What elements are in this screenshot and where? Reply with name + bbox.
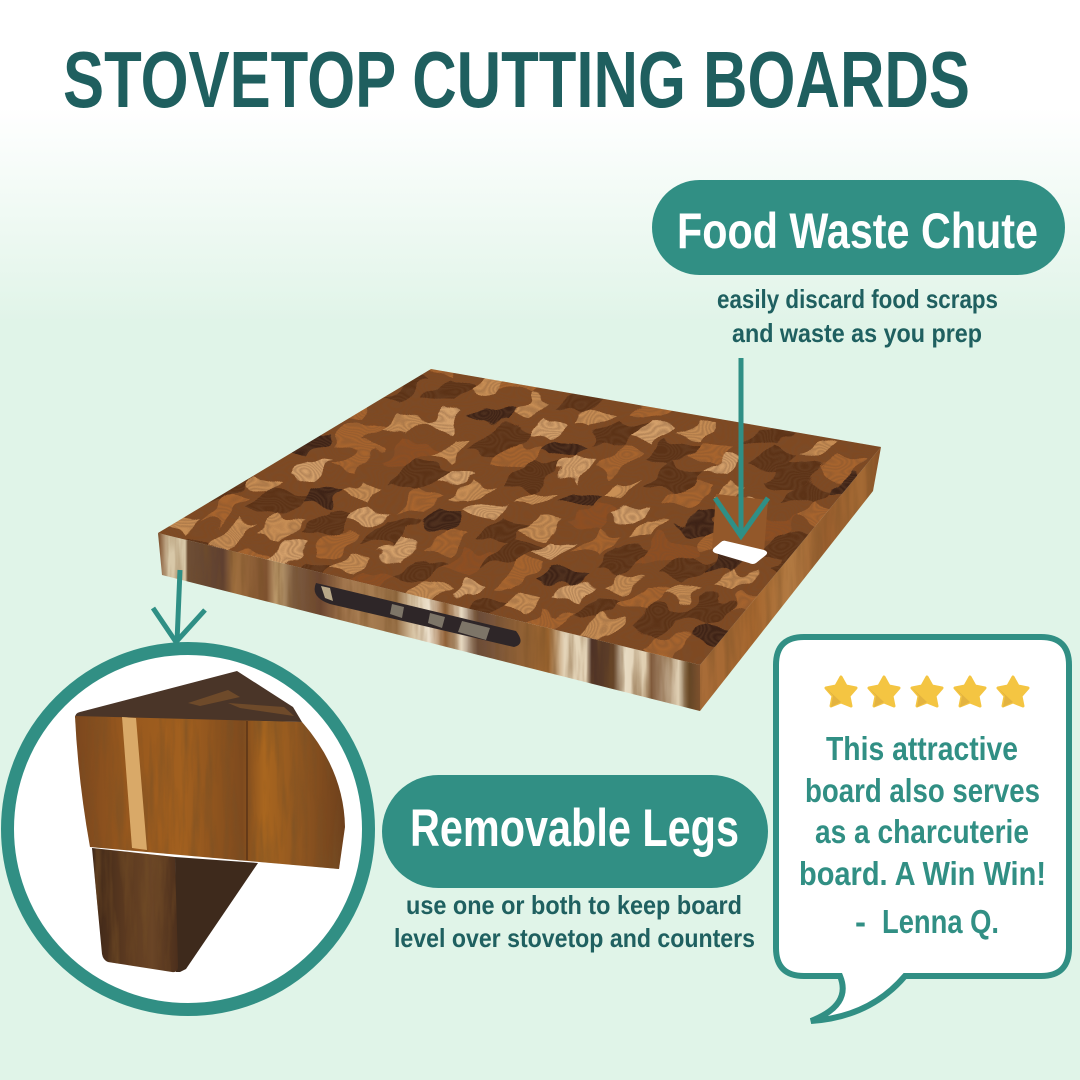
board top edge — [75, 671, 302, 722]
food waste chute description: and waste as you prep — [732, 318, 982, 348]
customer quote: This attractive — [826, 730, 1018, 767]
food waste chute description: easily discard food scraps — [717, 284, 998, 314]
cutting board photo — [130, 339, 973, 720]
arrow to removable leg — [153, 570, 205, 642]
removable legs description — [394, 890, 755, 953]
arrow to food waste chute — [715, 358, 768, 536]
food waste chute description — [717, 284, 998, 348]
removable leg closeup circle — [8, 648, 368, 1010]
board side face — [75, 716, 345, 869]
five star rating — [826, 677, 1028, 707]
customer quote: board also serves — [805, 772, 1040, 809]
removable legs description: use one or both to keep board — [406, 890, 742, 920]
carrying handle slot — [315, 583, 521, 647]
customer quote: Lenna Q. — [882, 903, 999, 940]
circle frame — [8, 648, 368, 1010]
leg front — [92, 848, 178, 972]
bubble outline — [776, 637, 1069, 1021]
customer quote — [799, 730, 1046, 940]
board end-grain top surface — [158, 369, 881, 665]
callout pill: removable legs — [382, 775, 768, 888]
board front side face — [158, 533, 700, 711]
leg side — [175, 857, 258, 972]
callout pill: removable legs: Removable Legs — [410, 799, 739, 858]
customer quote: board. A Win Win! — [799, 855, 1046, 892]
removable legs description: level over stovetop and counters — [394, 923, 755, 953]
board right side face — [700, 447, 881, 711]
testimonial speech bubble — [776, 637, 1069, 1021]
callout pill: food waste chute — [652, 180, 1065, 275]
customer quote: - — [855, 903, 866, 940]
food waste chute recess — [712, 494, 768, 564]
light wood stripe — [122, 717, 147, 850]
customer quote: as a charcuterie — [815, 813, 1029, 850]
